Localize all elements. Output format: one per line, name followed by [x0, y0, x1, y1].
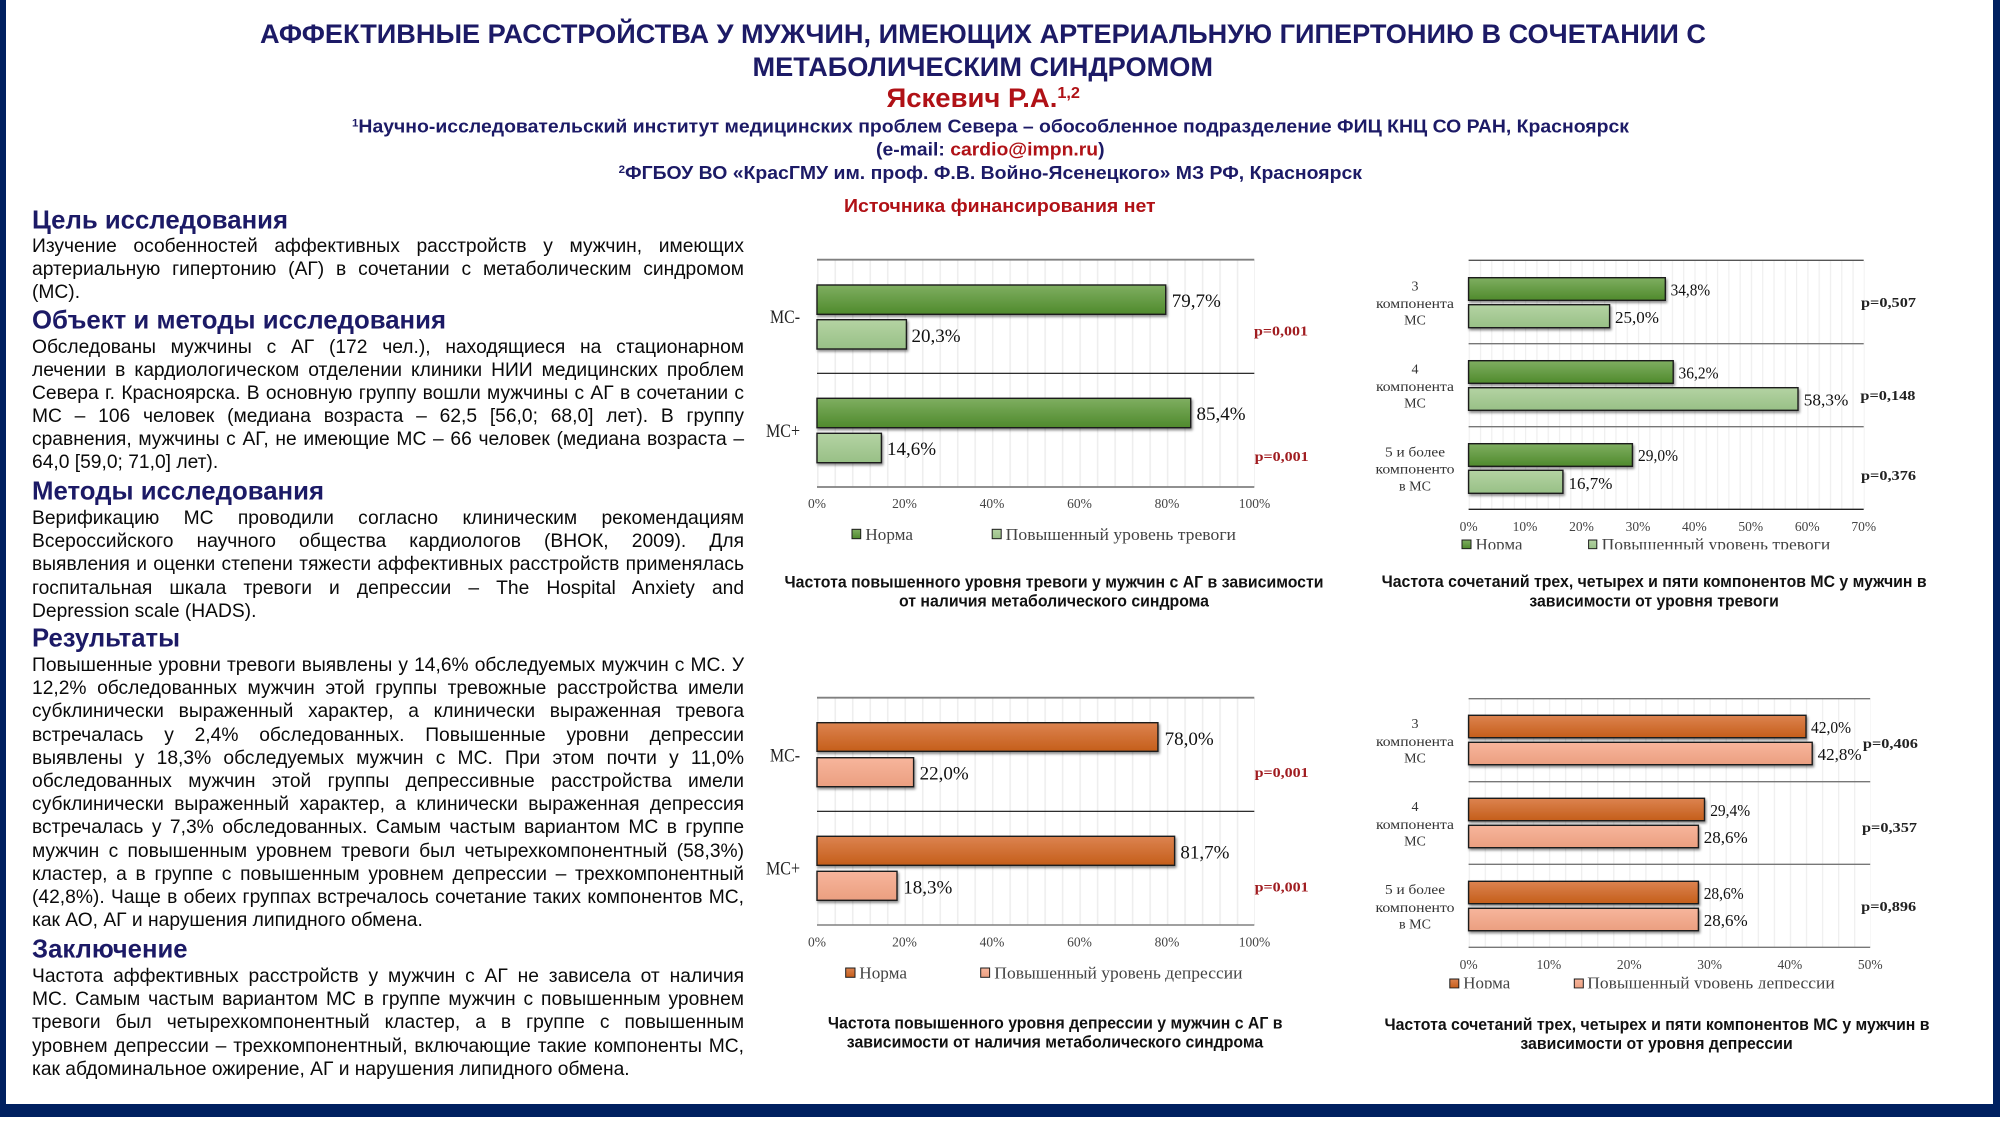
- axis labels: 50%: [1858, 957, 1883, 972]
- heading: object and methods: Объект и методы исследования: [32, 304, 446, 334]
- category labels: МС: [1404, 314, 1426, 328]
- caption: components by anxiety: зависимости от уровня тревоги: [1529, 592, 1779, 610]
- legend: Повышенный уровень депрессии: [994, 964, 1242, 982]
- author: Яскевич Р.А.: [886, 83, 1054, 113]
- value labels: 28,6%: [1704, 884, 1744, 903]
- category labels: компонента: [1376, 735, 1455, 750]
- legend: Норма: [865, 525, 913, 544]
- axis labels: 20%: [892, 934, 917, 950]
- text: object and methods: лечении в кардиологическом отделении клиники НИИ медицинских проблем: [32, 359, 744, 381]
- bars: [1469, 278, 1798, 493]
- axis labels: 80%: [1155, 934, 1179, 950]
- text: results: обследованных мужчин этой группы депрессивные расстройства имели: [32, 770, 744, 792]
- p values: p=0,001: [1255, 450, 1309, 465]
- text: results: выявлены у 18,3% обследуемых мужчин с МС. При этом почти у 11,0%: [32, 747, 744, 769]
- axis labels: 20%: [1617, 957, 1642, 972]
- axis labels: 80%: [1155, 496, 1179, 511]
- affiliation 1: 1: [352, 118, 358, 130]
- caption: components by depression: зависимости от уровня депрессии: [1520, 1035, 1793, 1053]
- category labels: в МС: [1399, 918, 1431, 932]
- text: methods: выявления и оценки степени тяжести аффективных расстройств применялась: [32, 553, 744, 575]
- text: results: субклинически выраженный характер, а клинически выраженная депрессия: [32, 793, 744, 815]
- category labels: МС-: [770, 746, 800, 766]
- axis labels: [808, 934, 1270, 950]
- header: [260, 18, 1706, 216]
- axis labels: 100%: [1239, 496, 1270, 511]
- legend: Норма: [1476, 535, 1523, 554]
- chart: MS components by depression: [1376, 699, 1918, 992]
- p values: p=0,001: [1254, 324, 1308, 340]
- funding note: Источника финансирования нет: [844, 195, 1156, 216]
- text: conclusion: [32, 965, 744, 1080]
- caption: depression chart: Частота повышенного уровня депрессии у мужчин с АГ в: [828, 1014, 1282, 1032]
- heading: goal: Цель исследования: [32, 204, 288, 234]
- value labels: 28,6%: [1704, 828, 1748, 847]
- chart: depression by MS: [766, 698, 1309, 982]
- p values: p=0,148: [1860, 389, 1915, 404]
- axis labels: 100%: [1239, 934, 1270, 950]
- legend: Норма: [859, 964, 907, 982]
- p values: p=0,357: [1862, 821, 1917, 836]
- text: methods: Всероссийского научного общества кардиологов (ВНОК, 2009). Для: [32, 530, 744, 552]
- heading: results: Результаты: [32, 622, 180, 652]
- value labels: 34,8%: [1671, 280, 1710, 300]
- text: results: мужчин с повышенным уровнем тревоги был четырехкомпонентный (58,3%): [32, 840, 744, 862]
- value labels: 81,7%: [1180, 842, 1230, 863]
- affiliation 1: Научно-исследовательский институт медицинских проблем Севера – обособленное подразделение ФИЦ КНЦ СО РАН, Красноярск: [358, 116, 1630, 136]
- axis labels: 60%: [1067, 496, 1092, 511]
- axis labels: 20%: [892, 496, 917, 511]
- legend: [1462, 538, 1830, 550]
- p values: [1860, 296, 1916, 484]
- text: results: субклинически выраженный характер, а клинически выраженная тревога: [32, 700, 744, 722]
- bars: [1469, 715, 1812, 931]
- author: 1,2: [1057, 85, 1080, 102]
- legend: Повышенный уровень тревоги: [1006, 525, 1236, 544]
- caption: components by depression: Частота сочетаний трех, четырех и пяти компонентов МС у мужчин в: [1384, 1016, 1930, 1034]
- panel: left text column: [32, 204, 744, 1080]
- bars: [817, 285, 1191, 463]
- category labels: МС+: [766, 858, 800, 880]
- category labels: 3: [1412, 280, 1418, 294]
- caption: depression chart: зависимости от наличия метаболического синдрома: [847, 1034, 1264, 1052]
- axis labels: 30%: [1697, 957, 1722, 972]
- legend: [1449, 976, 1834, 988]
- caption: anxiety chart: Частота повышенного уровня тревоги у мужчин с АГ в зависимости: [784, 574, 1324, 592]
- text: conclusion: тревоги был четырехкомпонентный кластер, а в группе с повышенным: [32, 1011, 744, 1033]
- heading: methods: Методы исследования: [32, 476, 324, 506]
- axis labels: 0%: [1460, 519, 1478, 534]
- text: results: кластер, а в группе с повышенным уровнем депрессии – трехкомпонентный: [32, 863, 744, 885]
- axis labels: 30%: [1626, 519, 1650, 534]
- value labels: [887, 291, 1246, 460]
- category labels: МС: [1404, 834, 1426, 850]
- text: goal: [32, 235, 744, 303]
- axis labels: 40%: [1778, 957, 1802, 972]
- title: [260, 18, 1706, 82]
- axis labels: [1460, 519, 1876, 534]
- p values: p=0,406: [1863, 737, 1918, 752]
- text: conclusion: МС. Самым частым вариантом МС в группе мужчин с повышенным уровнем: [32, 988, 744, 1010]
- legend: Норма: [1463, 974, 1511, 992]
- p values: [1255, 766, 1309, 896]
- p values: p=0,896: [1861, 900, 1916, 915]
- category labels: 3: [1412, 717, 1418, 732]
- axis labels: [1460, 957, 1883, 972]
- p values: [1861, 737, 1918, 915]
- legend: [852, 525, 1236, 544]
- title: АФФЕКТИВНЫЕ РАССТРОЙСТВА У МУЖЧИН, ИМЕЮЩИХ АРТЕРИАЛЬНУЮ ГИПЕРТОНИЮ В СОЧЕТАНИИ С: [260, 18, 1706, 49]
- axis labels: 40%: [980, 496, 1004, 511]
- category labels: компоненто: [1376, 901, 1454, 916]
- axis labels: 0%: [808, 934, 826, 950]
- value labels: [1568, 280, 1848, 493]
- value labels: 20,3%: [912, 326, 961, 347]
- category labels: [766, 307, 800, 442]
- value labels: 29,0%: [1638, 446, 1678, 465]
- value labels: 42,8%: [1818, 745, 1862, 764]
- category labels: [766, 746, 800, 880]
- value labels: [903, 729, 1230, 898]
- axis labels: 20%: [1569, 519, 1594, 534]
- navy frame left: [0, 0, 6, 1117]
- affiliation 2: 2: [619, 164, 625, 176]
- value labels: 14,6%: [887, 439, 936, 460]
- category labels: МС+: [766, 421, 800, 442]
- value labels: 22,0%: [920, 764, 969, 784]
- axis labels: 0%: [1460, 957, 1478, 972]
- email: (e-mail: cardio@impn.ru ): [876, 138, 1105, 160]
- axis labels: 40%: [980, 934, 1004, 950]
- p values: p=0,376: [1861, 469, 1916, 484]
- heading: conclusion: Заключение: [32, 934, 188, 964]
- text: methods: [32, 507, 744, 622]
- axis labels: 10%: [1537, 957, 1561, 972]
- category labels: 5 и более: [1385, 446, 1445, 460]
- text: methods: Depression scale (HADS).: [32, 600, 256, 622]
- category labels: 4: [1412, 800, 1418, 815]
- category labels: 5 и более: [1385, 883, 1445, 898]
- value labels: 25,0%: [1615, 308, 1659, 327]
- caption: anxiety chart: от наличия метаболического синдрома: [899, 592, 1210, 610]
- p values: p=0,001: [1255, 880, 1309, 896]
- axis labels: 60%: [1067, 934, 1092, 950]
- text: conclusion: как абдоминальное ожирение, АГ и нарушения липидного обмена.: [32, 1058, 630, 1080]
- text: conclusion: Частота аффективных расстройств у мужчин с АГ не зависела от наличия: [32, 965, 744, 987]
- text: results: (42,8%). Чаще в обеих группах встречалось сочетание таких компонентов МС,: [32, 886, 744, 908]
- chart: MS components by anxiety: [1376, 260, 1916, 554]
- caption: components by depression: [1384, 1016, 1930, 1053]
- axis labels: 50%: [1738, 519, 1763, 534]
- category labels: [1376, 717, 1455, 932]
- legend: Повышенный уровень депрессии: [1587, 974, 1835, 992]
- text: results: [32, 654, 744, 931]
- value labels: 29,4%: [1710, 801, 1750, 820]
- value labels: 58,3%: [1804, 390, 1848, 410]
- text: object and methods: 64,0 [59,0; 71,0] лет).: [32, 451, 218, 473]
- value labels: 28,6%: [1704, 911, 1748, 930]
- caption: depression chart: [828, 1014, 1282, 1052]
- axis labels: 0%: [808, 496, 826, 511]
- value labels: 78,0%: [1165, 729, 1214, 750]
- caption: components by anxiety: [1382, 573, 1927, 610]
- text: methods: госпитальная шкала тревоги и депрессии – The Hospital Anxiety and: [32, 577, 744, 599]
- value labels: 42,0%: [1811, 718, 1851, 737]
- text: results: встречалась у 7,3% обследованных. Самым частым вариантом МС в группе: [32, 816, 744, 838]
- category labels: компонента: [1376, 380, 1455, 395]
- category labels: 4: [1412, 362, 1418, 378]
- p values: [1254, 324, 1309, 465]
- category labels: компоненто: [1376, 462, 1454, 478]
- caption: anxiety chart: [784, 574, 1324, 610]
- bars: [817, 723, 1175, 900]
- text: object and methods: сравнения, мужчины с АГ, не имеющие МС – 66 человек (медиана возраста –: [32, 428, 744, 450]
- p values: p=0,001: [1255, 766, 1309, 781]
- category labels: в МС: [1399, 480, 1431, 494]
- legend: Повышенный уровень тревоги: [1602, 535, 1830, 554]
- title: МЕТАБОЛИЧЕСКИМ СИНДРОМОМ: [752, 52, 1213, 82]
- category labels: [1376, 280, 1455, 494]
- text: results: как АО, АГ и нарушения липидного обмена.: [32, 909, 423, 931]
- text: goal: артериальную гипертонию (АГ) в сочетании с метаболическим синдромом: [32, 258, 744, 280]
- category labels: компонента: [1376, 818, 1455, 833]
- text: results: встречалась у 2,4% обследованных. Повышенные уровни депрессии: [32, 724, 744, 746]
- axis labels: [808, 496, 1270, 511]
- value labels: 36,2%: [1678, 364, 1718, 382]
- value labels: 18,3%: [903, 878, 952, 898]
- axis labels: 60%: [1795, 519, 1820, 534]
- text: results: Повышенные уровни тревоги выявлены у 14,6% обследуемых мужчин с МС. У: [32, 654, 744, 676]
- text: methods: Верификацию МС проводили согласно клиническим рекомендациям: [32, 507, 744, 529]
- category labels: МС: [1404, 396, 1426, 412]
- category labels: МС: [1404, 752, 1426, 766]
- value labels: 85,4%: [1196, 404, 1246, 425]
- text: goal: Изучение особенностей аффективных расстройств у мужчин, имеющих: [32, 235, 744, 257]
- navy frame bottom: [0, 1104, 2000, 1117]
- axis labels: 10%: [1513, 519, 1537, 534]
- text: conclusion: уровнем депрессии – трехкомпонентный, включающие такие компоненты МС,: [32, 1035, 744, 1057]
- category labels: МС-: [770, 307, 800, 328]
- text: object and methods: Обследованы мужчины с АГ (172 чел.), находящиеся на стационарном: [32, 336, 744, 358]
- caption: components by anxiety: Частота сочетаний трех, четырех и пяти компонентов МС у мужчин в: [1382, 573, 1927, 591]
- value labels: 79,7%: [1172, 291, 1221, 312]
- text: object and methods: Севера г. Красноярска. В основную группу вошли мужчины с АГ в сочетании с: [32, 382, 744, 404]
- chart: anxiety by MS: [766, 260, 1309, 544]
- text: object and methods: [32, 336, 744, 473]
- navy frame right: [1993, 0, 2000, 1117]
- axis labels: 70%: [1851, 519, 1876, 534]
- text: object and methods: МС – 106 человек (медиана возраста – 62,5 [56,0; 68,0] лет). В группу: [32, 405, 744, 427]
- value labels: 16,7%: [1568, 474, 1612, 493]
- affiliation 2: ФГБОУ ВО «КрасГМУ им. проф. Ф.В. Войно-Ясенецкого» МЗ РФ, Красноярск: [625, 162, 1363, 183]
- category labels: компонента: [1376, 297, 1455, 312]
- legend: [846, 964, 1242, 982]
- axis labels: 40%: [1682, 519, 1707, 534]
- text: results: 12,2% обследованных мужчин этой группы тревожные расстройства имели: [32, 677, 744, 699]
- p values: p=0,507: [1861, 296, 1916, 311]
- text: goal: (МС).: [32, 281, 80, 303]
- value labels: [1704, 718, 1862, 930]
